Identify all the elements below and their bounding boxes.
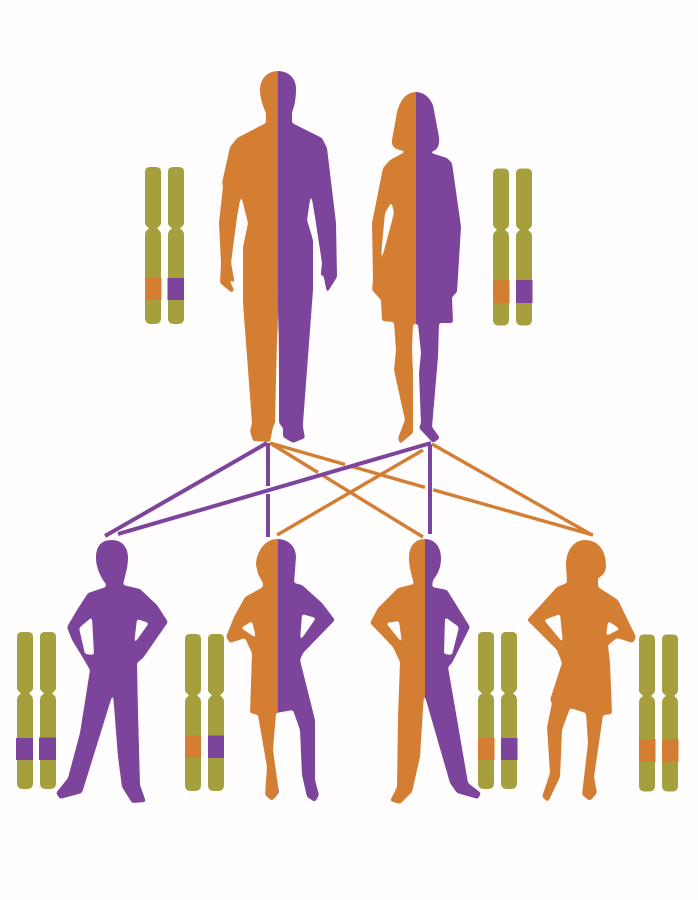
inheritance lines: orange — [270, 443, 593, 537]
icon: child 3 boy half orange half purple — [370, 539, 481, 804]
chromosome pair: child 1 — [16, 632, 56, 789]
icon: child 2 girl half orange half purple — [226, 539, 335, 802]
chromosome pair: child 3 — [478, 632, 518, 789]
icon: father silhouette half orange half purple — [219, 71, 337, 443]
chromosome pair: father — [145, 167, 184, 324]
infographic: chromosome inheritance from two parents to four children — [16, 71, 678, 804]
icon: child 4 girl all orange — [527, 540, 636, 802]
chromosome pair: child 2 — [185, 634, 224, 791]
icon: mother silhouette half orange half purple — [372, 92, 461, 444]
chromosome pair: mother — [493, 168, 532, 326]
icon: child 1 boy all purple — [56, 540, 168, 803]
inheritance lines: purple — [105, 443, 431, 537]
chromosome pair: child 4 — [639, 634, 678, 792]
